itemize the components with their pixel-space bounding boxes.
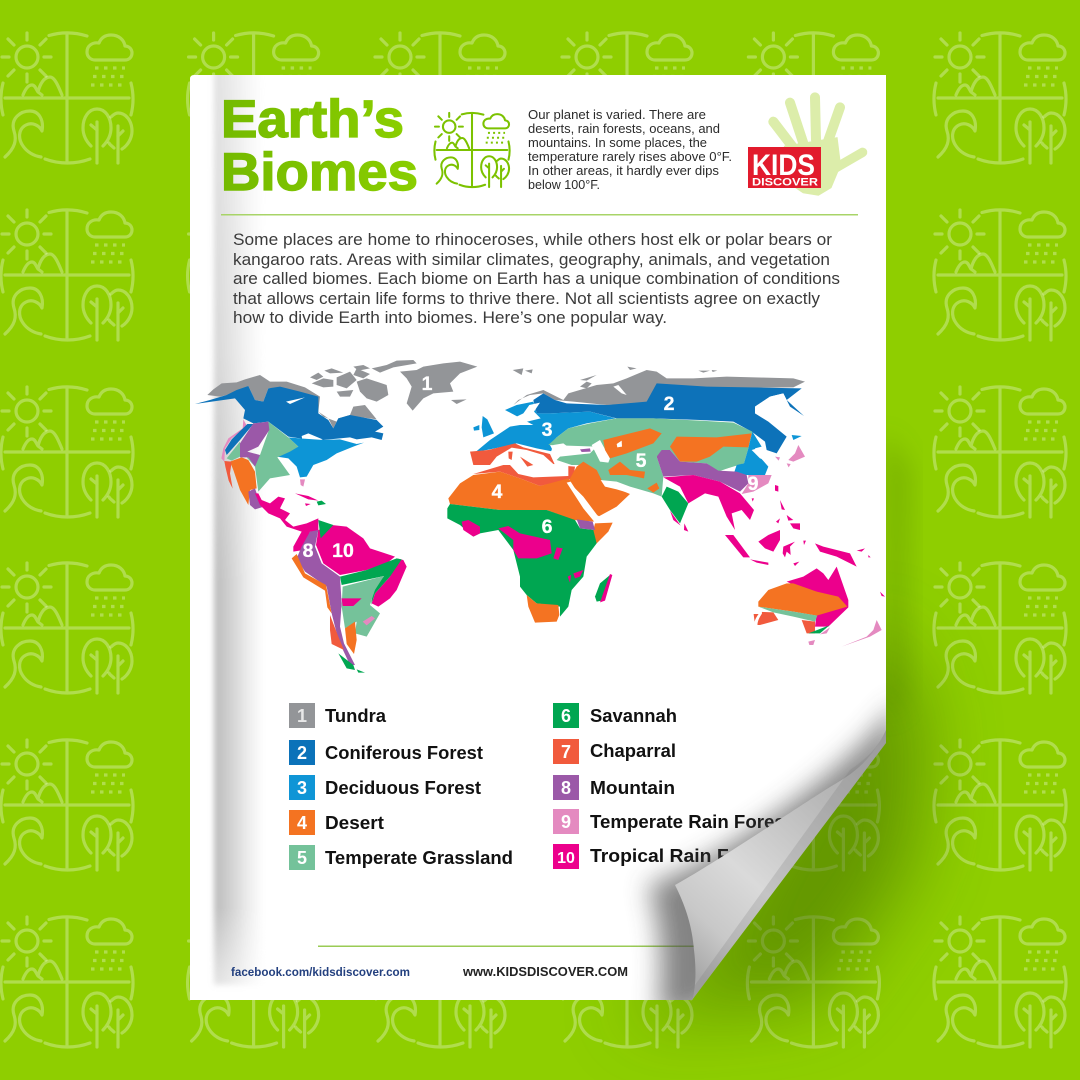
tropical SE Asia and India xyxy=(663,475,754,530)
mountain Rockies xyxy=(240,422,269,467)
logo: Kids Discover: KIDS xyxy=(752,149,815,182)
header blurb: deserts, rain forests, oceans, and xyxy=(528,121,720,136)
Australia xyxy=(787,567,848,627)
logo red box xyxy=(748,147,821,188)
South America tropical xyxy=(316,525,395,575)
map numbers: 2 xyxy=(664,393,675,415)
legend: mountain: 8 xyxy=(561,778,571,798)
intro paragraph xyxy=(233,230,840,327)
map numbers: 5 xyxy=(636,450,647,472)
legend right column xyxy=(553,703,791,869)
lakes xyxy=(286,397,305,404)
Madagascar xyxy=(595,575,610,602)
Andes mountain xyxy=(297,530,355,665)
legend: tundra xyxy=(289,703,387,728)
map numbers: 3 xyxy=(542,419,553,441)
legend: tropical rain forest xyxy=(553,844,776,869)
legend: savannah xyxy=(553,703,677,728)
islands of Southeast Asia xyxy=(725,485,885,597)
map numbers: 4 xyxy=(492,481,503,503)
intro paragraph: that allows certain life forms to thrive there. Not all scientists agree on exactly xyxy=(233,289,820,308)
grassland Brazil xyxy=(342,576,384,637)
legend: coniferous forest: Coniferous Forest xyxy=(325,742,483,763)
legend: chaparral: Chaparral xyxy=(590,740,676,761)
paper cast shadow xyxy=(620,430,925,1020)
coniferous Asia xyxy=(533,383,804,453)
map numbers: 10 xyxy=(332,540,354,562)
desert Mexico xyxy=(230,457,257,505)
footer website: www.KIDSDISCOVER.COM xyxy=(462,964,628,979)
legend: mountain: Mountain xyxy=(590,777,675,798)
deciduous forest east USA xyxy=(277,437,364,477)
map: Europe, Asia, Africa and Oceania xyxy=(447,367,885,647)
map numbers: 6 xyxy=(542,516,553,538)
header divider xyxy=(221,214,858,216)
legend: temperate rain forest: 9 xyxy=(561,812,571,832)
Mediterranean sea xyxy=(490,448,568,477)
legend left column xyxy=(289,703,513,870)
legend: tropical rain forest: Tropical Rain Forest xyxy=(590,845,776,866)
legend: deciduous forest xyxy=(289,775,481,800)
title: Biomes xyxy=(221,143,418,202)
Tibet mountain xyxy=(657,450,748,492)
legend: mountain xyxy=(553,775,675,800)
logo: Kids Discover xyxy=(748,97,863,195)
header blurb: mountains. In some places, the xyxy=(528,135,707,150)
header blurb: temperature rarely rises above 0°F. xyxy=(528,149,732,164)
tundra Eurasia xyxy=(513,367,805,405)
tropical Central America xyxy=(255,493,318,552)
title xyxy=(221,90,418,202)
legend: temperate grassland: 5 xyxy=(297,848,307,868)
coniferous forest North America xyxy=(195,386,383,440)
Caribbean xyxy=(295,493,318,501)
intro paragraph: are called biomes. Each biome on Earth has a unique combination of conditions xyxy=(233,269,840,288)
legend: coniferous forest: 2 xyxy=(297,743,307,763)
header icon: biome symbol xyxy=(434,113,510,187)
legend: savannah: Savannah xyxy=(590,705,677,726)
legend: desert xyxy=(289,810,384,835)
New Zealand and Tasmania xyxy=(842,620,882,647)
map: Americas xyxy=(195,360,533,673)
map numbers: 8 xyxy=(303,540,314,562)
legend: temperate rain forest: Temperate Rain Forest xyxy=(590,811,791,832)
footer facebook link: facebook.com/kidsdiscover.com xyxy=(231,965,410,979)
Sahara and Arabia deserts xyxy=(448,472,595,522)
legend: tundra: Tundra xyxy=(325,705,387,726)
legend: chaparral: 7 xyxy=(561,742,571,762)
tropical Africa xyxy=(462,520,583,583)
deciduous China xyxy=(733,432,768,475)
grassland North America xyxy=(247,422,298,492)
legend: temperate grassland: Temperate Grassland xyxy=(325,847,513,868)
title: Earth’s xyxy=(221,90,404,149)
paper fold shading xyxy=(211,75,256,986)
paper sheet xyxy=(190,75,886,1000)
page curl flap xyxy=(675,730,886,1000)
legend: desert: Desert xyxy=(325,812,384,833)
map numbers: 9 xyxy=(748,473,759,495)
temperate rain forest Asia xyxy=(742,475,772,494)
header blurb: Our planet is varied. There are xyxy=(528,107,706,122)
curl shadow on paper xyxy=(648,700,900,1015)
footer divider xyxy=(318,946,694,947)
west coast strip xyxy=(221,419,247,462)
legend: deciduous forest: Deciduous Forest xyxy=(325,777,481,798)
map numbers xyxy=(303,373,762,630)
logo: Kids Discover: DISCOVER xyxy=(752,176,818,188)
legend: tropical rain forest: 10 xyxy=(557,850,575,867)
legend: coniferous forest xyxy=(289,740,483,765)
map numbers: 7 xyxy=(752,608,762,630)
legend: deciduous forest: 3 xyxy=(297,778,307,798)
world biome map xyxy=(195,360,885,673)
intro paragraph: Some places are home to rhinoceroses, while others host elk or polar bears or xyxy=(233,230,832,249)
intro paragraph: how to divide Earth into biomes. Here’s one popular way. xyxy=(233,308,667,327)
header blurb xyxy=(528,107,732,192)
Iberia and Mediterranean chaparral xyxy=(470,443,575,486)
deciduous Europe xyxy=(476,402,616,452)
header blurb: In other areas, it hardly ever dips xyxy=(528,163,719,178)
tundra North America and arctic islands xyxy=(207,360,533,428)
Asian deserts xyxy=(603,428,662,458)
Greenland xyxy=(400,362,477,411)
legend: savannah: 6 xyxy=(561,706,571,726)
header blurb: below 100°F. xyxy=(528,177,600,192)
savannah Brazil xyxy=(340,558,402,605)
savannah Africa xyxy=(447,504,597,617)
legend: desert: 4 xyxy=(297,813,307,833)
intro paragraph: kangaroo rats. Areas with similar climates, geography, animals, and vegetation xyxy=(233,250,830,269)
temperate grassland Asia xyxy=(548,418,752,497)
legend: chaparral xyxy=(553,739,676,764)
map numbers: 1 xyxy=(422,373,433,395)
legend: tundra: 1 xyxy=(297,706,307,726)
logo hand print xyxy=(773,97,863,195)
